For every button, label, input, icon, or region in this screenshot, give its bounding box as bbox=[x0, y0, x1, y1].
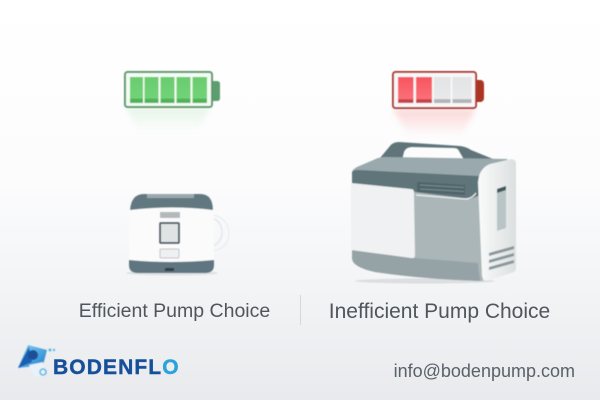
icon: small efficient pump bbox=[126, 194, 229, 276]
contact email: info@bodenpump.com bbox=[394, 361, 575, 381]
divider bbox=[300, 295, 301, 325]
white front panel bbox=[351, 183, 415, 258]
icon: low red battery bbox=[393, 72, 484, 136]
logo wordmark: BODENFLO bbox=[53, 356, 180, 379]
pump body bbox=[352, 178, 483, 281]
icon: full green battery bbox=[125, 72, 220, 132]
logo icon bbox=[18, 345, 55, 377]
pump handle bbox=[380, 142, 493, 163]
heading: efficient pump choice: Efficient Pump Choice bbox=[79, 300, 270, 322]
logo: Bodenflo bbox=[18, 345, 180, 379]
vent slots bbox=[417, 182, 465, 195]
white side panel bbox=[478, 159, 516, 280]
pump lid bbox=[352, 157, 508, 180]
dark lid band bbox=[352, 160, 505, 199]
heading: inefficient pump choice: Inefficient Pump Choice bbox=[329, 300, 550, 323]
icon: large inefficient pump bbox=[351, 142, 516, 284]
